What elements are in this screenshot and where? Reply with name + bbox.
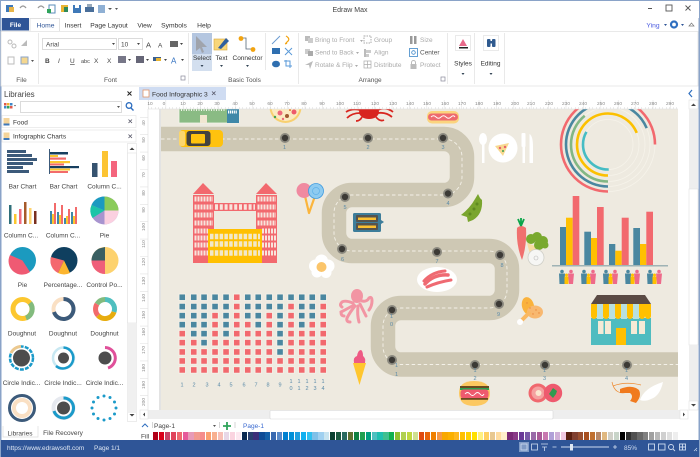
menu tabs: View xyxy=(137,22,152,30)
icon: circle indicator 6 xyxy=(90,394,118,422)
basic tools group xyxy=(192,33,292,84)
person group 4 xyxy=(625,270,640,284)
infographic charts row xyxy=(2,130,136,142)
arrange group: Protect xyxy=(420,62,441,69)
select tool: Select xyxy=(193,55,211,62)
icon: fork knife plate xyxy=(479,133,533,163)
waffle axis numbers: 7 xyxy=(254,382,258,388)
road pins: 9 xyxy=(497,312,500,318)
font group: abc xyxy=(81,59,90,65)
road pins: 3 xyxy=(543,376,546,382)
label: row 2: Column C... xyxy=(46,232,80,240)
home tab: Home xyxy=(37,22,55,30)
waffle axis numbers: 1 xyxy=(180,382,184,388)
font group: Font xyxy=(104,77,117,84)
left ruler: 130 xyxy=(141,277,147,285)
search row xyxy=(4,102,134,112)
chart: grouped bars xyxy=(552,196,668,266)
icon: castle building xyxy=(193,183,277,263)
road pins: 1 xyxy=(395,363,398,369)
editing button: Editing xyxy=(481,60,501,68)
waffle axis numbers: 9 xyxy=(278,382,282,388)
label: row 3 xyxy=(18,282,123,289)
arrange group xyxy=(305,36,445,84)
waffle axis numbers: 1 xyxy=(297,386,301,392)
label: row 4: Doughnut xyxy=(8,330,36,338)
window title: Edraw Max xyxy=(332,7,368,14)
left ruler: 190 xyxy=(141,381,147,389)
top ruler: 20 xyxy=(197,101,203,107)
arrange group: Send to Back xyxy=(315,50,354,56)
font group: A xyxy=(171,56,177,66)
top ruler: 110 xyxy=(353,101,361,107)
icon: octopus xyxy=(340,289,372,322)
road pins: 7 xyxy=(435,259,439,265)
waffle axis numbers: 0 xyxy=(289,386,293,392)
top ruler: 100 xyxy=(336,101,344,107)
top ruler: 170 xyxy=(458,101,466,107)
label: row 4: Doughnut xyxy=(49,330,77,338)
font group: U xyxy=(70,58,75,65)
font group: B xyxy=(45,58,50,65)
libraries tabs xyxy=(3,426,84,438)
waffle axis numbers: 1 xyxy=(289,379,293,385)
road pins: 1 xyxy=(395,372,398,378)
top ruler: 210 xyxy=(527,101,535,107)
left ruler: 150 xyxy=(141,311,147,319)
icon: circle indicator 2 xyxy=(53,348,74,368)
left ruler: 60 xyxy=(141,155,147,161)
editing button xyxy=(481,36,501,75)
waffle axis numbers: 1 xyxy=(313,379,317,385)
left ruler: 180 xyxy=(141,364,147,372)
icon: circle indicator 5 xyxy=(54,398,74,418)
arrange group: Distribute xyxy=(374,62,402,69)
label: row 1: Bar Chart xyxy=(9,184,37,190)
arrange group: Arrange xyxy=(358,77,382,84)
top ruler: 240 xyxy=(579,101,587,107)
basic tools group: Basic Tools xyxy=(228,77,262,84)
icon: pizza xyxy=(270,109,302,123)
ribbon xyxy=(1,32,698,86)
person group 2 xyxy=(581,270,596,284)
person group 1 xyxy=(559,270,574,284)
top ruler: 10 xyxy=(147,101,153,107)
icon: sausage plate xyxy=(417,267,457,292)
label: row 3: Percentage... xyxy=(44,282,83,289)
road pins: 3 xyxy=(441,145,445,151)
icon: ice cream cone xyxy=(353,350,366,385)
icon: doughnut 1 xyxy=(13,300,32,318)
icon: fried egg xyxy=(309,254,334,278)
arrange group: Rotate & Flip xyxy=(315,62,353,69)
road pins: 1 xyxy=(390,314,393,320)
libraries header xyxy=(4,90,132,99)
font group: A xyxy=(158,42,163,50)
icon: shrimp xyxy=(612,382,641,403)
page tabs row xyxy=(142,422,264,430)
waffle axis numbers: 1 xyxy=(305,379,309,385)
top ruler: 40 xyxy=(232,101,238,107)
title bar xyxy=(1,1,699,18)
infographic charts row: Infographic Charts xyxy=(13,134,67,140)
top ruler: 70 xyxy=(284,101,290,107)
top ruler: 260 xyxy=(614,101,622,107)
icon: doughnut 2 xyxy=(54,299,74,319)
user and settings: Ying xyxy=(646,22,660,30)
waffle axis numbers: 3 xyxy=(205,382,209,388)
road pins: 4 xyxy=(446,201,450,207)
document tab xyxy=(139,87,226,100)
libraries tabs: Libraries xyxy=(8,430,33,438)
left ruler: 120 xyxy=(141,258,147,266)
label: row 5: Circle Indic... xyxy=(3,380,40,387)
file group xyxy=(8,40,34,84)
status bar: Page 1/1 xyxy=(94,445,120,452)
icon: pie 3 xyxy=(50,247,78,274)
icon: column chart 3 xyxy=(50,203,77,224)
view mode icons xyxy=(519,442,556,452)
top ruler: 10 xyxy=(180,101,186,107)
top ruler: 120 xyxy=(371,101,379,107)
waffle axis numbers xyxy=(180,379,324,390)
icon: circle indicator 1 xyxy=(10,346,33,370)
road pins: 5 xyxy=(343,205,347,211)
icon: pie 1 xyxy=(90,196,118,224)
person group 5 xyxy=(647,270,662,284)
status bar xyxy=(1,440,699,457)
label: row 3: Control Po... xyxy=(86,282,123,289)
top ruler: 140 xyxy=(406,101,414,107)
icon: column chart 1 xyxy=(92,151,117,177)
home tab xyxy=(30,18,60,31)
icon: burger xyxy=(459,381,490,406)
waffle axis numbers: 6 xyxy=(242,382,246,388)
styles button: Styles xyxy=(454,60,473,68)
road pins xyxy=(280,133,632,382)
left ruler: 90 xyxy=(141,207,147,213)
label: row 1 xyxy=(9,184,122,190)
label: row 2 xyxy=(4,232,110,240)
waffle axis numbers: 5 xyxy=(229,382,233,388)
label: row 5: Circle Indic... xyxy=(44,380,82,387)
fill label: Fill xyxy=(141,434,150,440)
libraries panel xyxy=(2,90,136,438)
panel collapse chevron xyxy=(689,90,692,97)
font group: I xyxy=(58,58,60,65)
font group: X xyxy=(94,58,99,65)
libraries tabs: File Recovery xyxy=(43,430,84,437)
icon: hotel xyxy=(178,109,240,124)
road pins: 2 xyxy=(473,376,477,382)
waffle axis numbers: 4 xyxy=(321,386,325,392)
top ruler: 150 xyxy=(423,101,431,107)
icon: bar chart 2 xyxy=(49,149,79,174)
top ruler: 290 xyxy=(666,101,674,107)
page tabs row: Page-1 xyxy=(154,423,175,430)
page fit icons xyxy=(648,444,697,451)
icon: circle indicator 4 xyxy=(10,396,34,420)
top ruler: 230 xyxy=(562,101,570,107)
icon: hot dog xyxy=(427,111,459,124)
library scrollbar xyxy=(128,144,136,422)
colour palette xyxy=(153,432,678,440)
icon: toaster xyxy=(353,213,384,232)
top ruler: 90 xyxy=(319,101,325,107)
horizontal scrollbar xyxy=(140,410,688,419)
text tool: Text xyxy=(216,55,228,62)
left ruler: 110 xyxy=(141,240,147,248)
font group: A xyxy=(146,40,151,50)
styles button xyxy=(454,36,473,75)
shape tools xyxy=(272,36,292,68)
left ruler: 170 xyxy=(141,346,147,354)
libraries header: Libraries xyxy=(4,90,35,99)
road xyxy=(161,139,678,364)
label: row 4: Doughnut xyxy=(90,330,119,338)
food row: Food xyxy=(13,120,28,126)
arrange group: Center xyxy=(420,50,440,56)
left ruler: 50 xyxy=(141,137,147,143)
waffle axis numbers: 8 xyxy=(266,382,270,388)
status bar: https://www.edrawsoft.com xyxy=(7,445,84,452)
arrange group: Bring to Front xyxy=(315,37,355,44)
menu tabs: Help xyxy=(197,22,211,30)
arrange group: Size xyxy=(420,37,433,44)
connector tool: Connector xyxy=(232,55,263,62)
left ruler: 100 xyxy=(141,223,147,231)
vertical scrollbar xyxy=(689,100,698,410)
left ruler: 160 xyxy=(141,328,147,336)
top ruler: 180 xyxy=(475,101,483,107)
top ruler: 200 xyxy=(511,101,519,107)
font group xyxy=(42,38,185,84)
road pins: 4 xyxy=(625,376,628,382)
road pins: 1 xyxy=(543,368,546,374)
icon: bar chart 1 xyxy=(7,150,37,173)
icon: peas xyxy=(461,194,482,222)
label: row 3: Pie xyxy=(18,282,28,289)
icon: tomatoes xyxy=(528,384,562,402)
icon: crab xyxy=(346,109,394,122)
page tabs row: Page-1 xyxy=(243,423,264,430)
waffle axis numbers: 1 xyxy=(321,379,325,385)
zoom slider xyxy=(561,444,617,450)
icon: chicken drumsticks xyxy=(517,296,543,325)
icon: balloons xyxy=(296,183,324,213)
font group: X xyxy=(107,58,112,65)
icon: doughnut 3 xyxy=(96,300,114,319)
left ruler: 140 xyxy=(141,294,147,302)
file group: File xyxy=(16,77,27,84)
top ruler: 220 xyxy=(545,101,553,107)
top ruler: 130 xyxy=(389,101,397,107)
road pins: 8 xyxy=(500,263,504,269)
waffle axis numbers: 4 xyxy=(217,382,221,388)
left ruler xyxy=(140,109,148,410)
label: row 5: Circle Indic... xyxy=(86,380,123,387)
icon: carrot xyxy=(517,218,526,260)
top ruler: 250 xyxy=(597,101,605,107)
menu tabs: Page Layout xyxy=(90,22,128,30)
icon: pie 2 xyxy=(9,247,36,275)
label: row 1: Bar Chart xyxy=(50,184,78,190)
canvas xyxy=(159,91,678,410)
waffle axis numbers: 2 xyxy=(192,382,196,388)
menu tabs: Insert xyxy=(65,22,82,30)
road pins: 6 xyxy=(341,257,344,263)
menu tabs: Symbols xyxy=(161,22,187,30)
left ruler: 80 xyxy=(141,190,147,196)
waffle axis numbers: 2 xyxy=(305,386,309,392)
road pins: 1 xyxy=(625,368,628,374)
label: row 2: Column C... xyxy=(4,232,38,240)
document tab: Food Infographic 3 xyxy=(152,92,208,98)
icon: broccoli and onion xyxy=(526,232,548,266)
top ruler: 30 xyxy=(214,101,220,107)
road pins: 1 xyxy=(473,368,477,374)
icon: people row xyxy=(559,270,662,284)
label: row 2: Pie xyxy=(100,232,110,240)
top ruler: 160 xyxy=(441,101,449,107)
top ruler: 280 xyxy=(649,101,657,107)
person group 3 xyxy=(603,270,618,284)
top ruler: 80 xyxy=(301,101,307,107)
top ruler xyxy=(140,100,678,109)
top ruler: 60 xyxy=(267,101,273,107)
label: row 5 xyxy=(3,380,123,387)
icon: column chart 2 xyxy=(9,202,36,224)
menu tabs xyxy=(2,18,694,31)
user and settings xyxy=(646,22,694,30)
file button: File xyxy=(10,22,21,29)
font group: Arial xyxy=(46,42,60,48)
icon: circle indicator 3 xyxy=(98,348,115,368)
icon: taxi xyxy=(179,130,223,147)
arrange group: Align xyxy=(374,50,389,56)
status bar: 85% xyxy=(624,445,637,452)
file button xyxy=(2,18,29,30)
icon: shop xyxy=(591,295,651,345)
chart: concentric rings xyxy=(561,98,655,192)
food row xyxy=(2,116,136,128)
arrange group: Group xyxy=(374,37,392,44)
top ruler: 190 xyxy=(493,101,501,107)
left ruler: 200 xyxy=(141,398,147,406)
chart: waffle grid xyxy=(179,294,326,392)
left ruler: 40 xyxy=(141,120,147,126)
waffle axis numbers: 1 xyxy=(297,379,301,385)
waffle axis numbers: 3 xyxy=(313,386,317,392)
road pins: 0 xyxy=(390,322,393,328)
left ruler: 70 xyxy=(141,172,147,178)
top ruler: 0 xyxy=(163,101,166,107)
label: row 1: Column C... xyxy=(87,184,122,190)
road pins: 2 xyxy=(366,145,370,151)
label: row 4 xyxy=(8,330,119,338)
top ruler: 270 xyxy=(631,101,639,107)
top ruler: 50 xyxy=(249,101,255,107)
icon: seashell xyxy=(640,382,663,401)
font group: 10 xyxy=(121,42,129,48)
quick access icons xyxy=(6,4,118,13)
icon: pie 4 xyxy=(92,247,118,274)
road pins: 1 xyxy=(283,145,286,151)
window controls xyxy=(648,5,690,11)
